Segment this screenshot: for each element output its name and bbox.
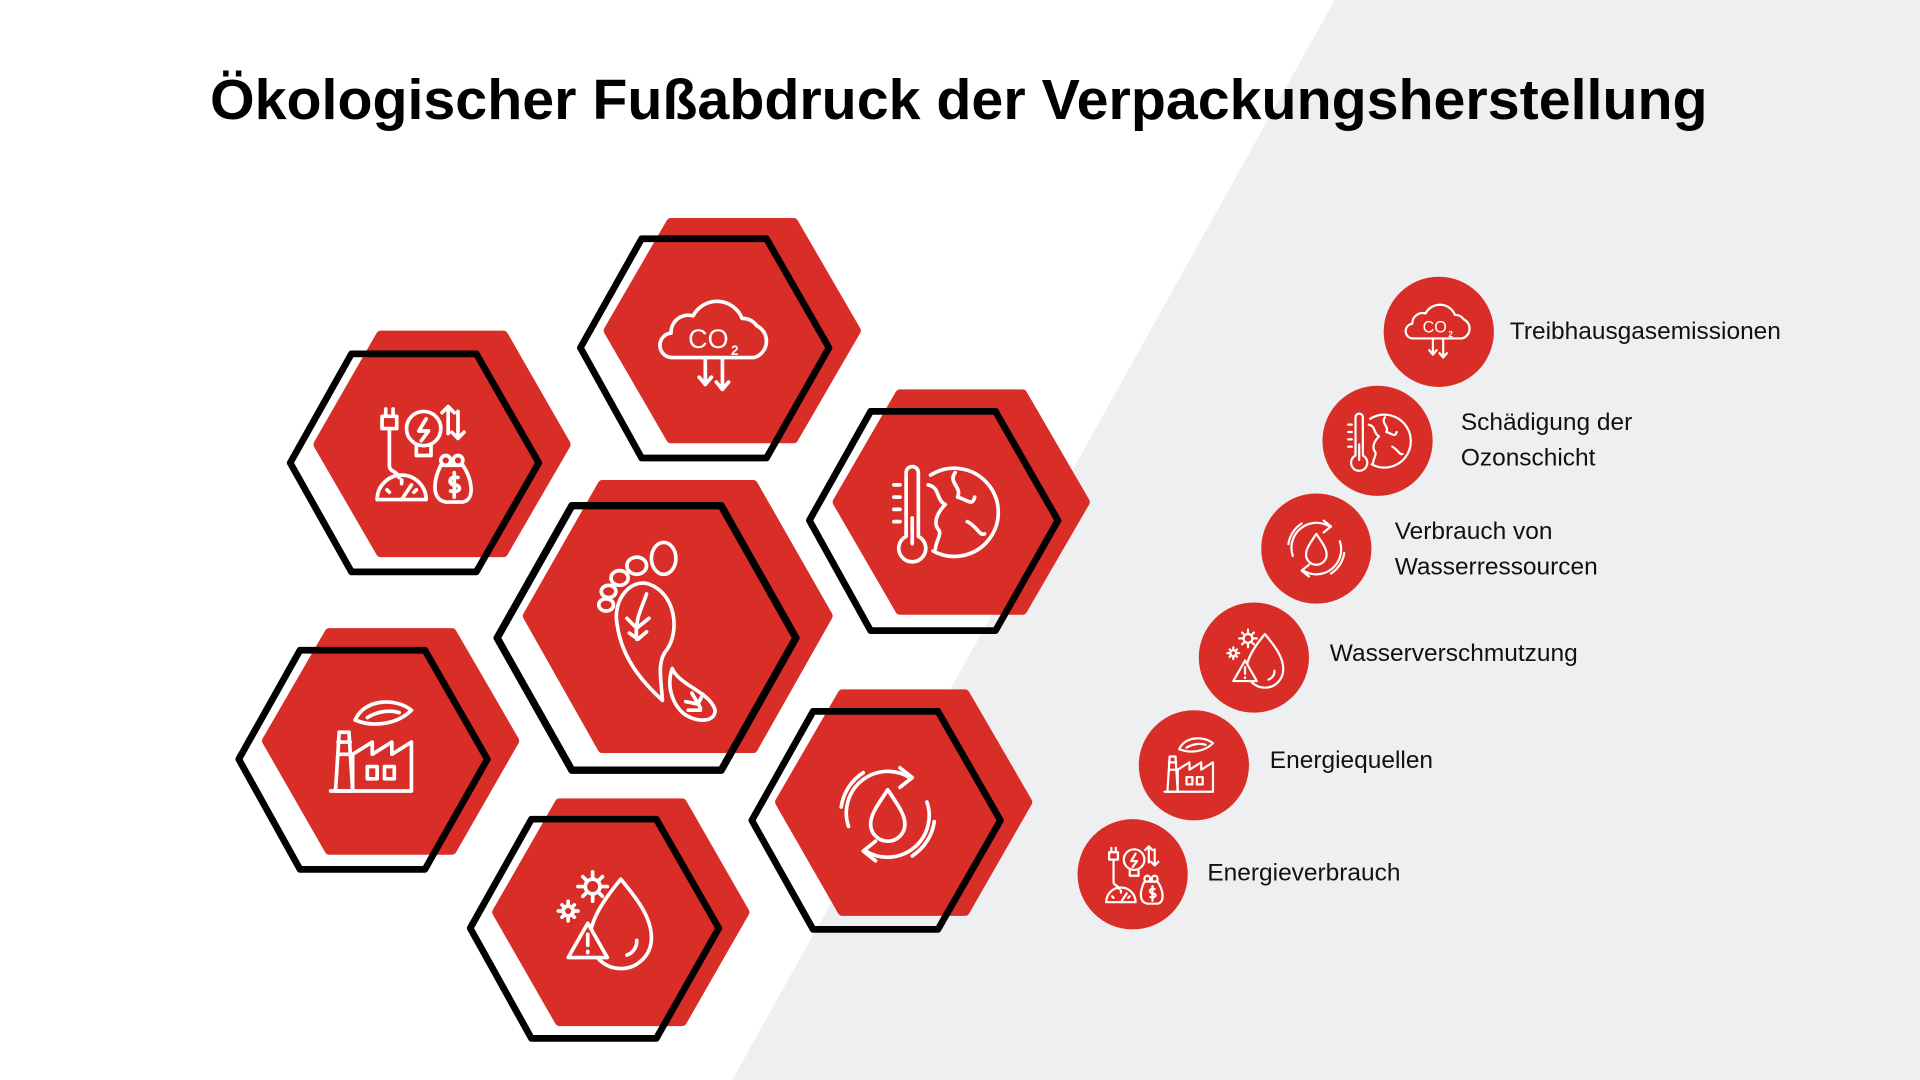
title: Ökologischer Fußabdruck der Verpackungsherstellung xyxy=(210,68,1708,131)
item: Verbrauch von Wasserressourcen xyxy=(1261,493,1598,604)
item: Energiequellen xyxy=(1139,710,1433,820)
item: Energiequellen: Energiequellen xyxy=(1270,747,1433,774)
item: Verbrauch von Wasserressourcen: Wasserressourcen xyxy=(1395,553,1598,580)
item: Wasserverschmutzung: Wasserverschmutzung xyxy=(1330,640,1578,667)
hexagon: greenhouse gas (CO2) xyxy=(580,223,856,458)
hexagon: energy sources (factory) xyxy=(239,633,514,869)
hexagon: water pollution xyxy=(470,803,744,1038)
hexagon: energy consumption xyxy=(290,336,566,572)
hexagon: ozone layer damage xyxy=(809,394,1085,631)
item: Energieverbrauch xyxy=(1078,819,1401,929)
item: Energieverbrauch: Energieverbrauch xyxy=(1207,859,1401,886)
legend list xyxy=(1078,277,1781,929)
hexagon: central footprint xyxy=(497,485,828,770)
item: Schädigung der Ozonschicht: Ozonschicht xyxy=(1461,444,1596,471)
background: grey diagonal panel xyxy=(732,0,1920,1080)
item: Wasserverschmutzung xyxy=(1199,602,1578,713)
item: Treibhausgasemissionen xyxy=(1384,277,1781,387)
hexagon: water cycle xyxy=(752,694,1027,929)
item: Treibhausgasemissionen: Treibhausgasemissionen xyxy=(1510,318,1781,345)
item: Schädigung der Ozonschicht xyxy=(1322,386,1632,496)
hexagon cluster xyxy=(239,223,1085,1038)
item: Verbrauch von Wasserressourcen: Verbrauch von xyxy=(1395,518,1552,545)
item: Schädigung der Ozonschicht: Schädigung der xyxy=(1461,409,1632,436)
icon: footprint with leaves xyxy=(599,542,715,720)
